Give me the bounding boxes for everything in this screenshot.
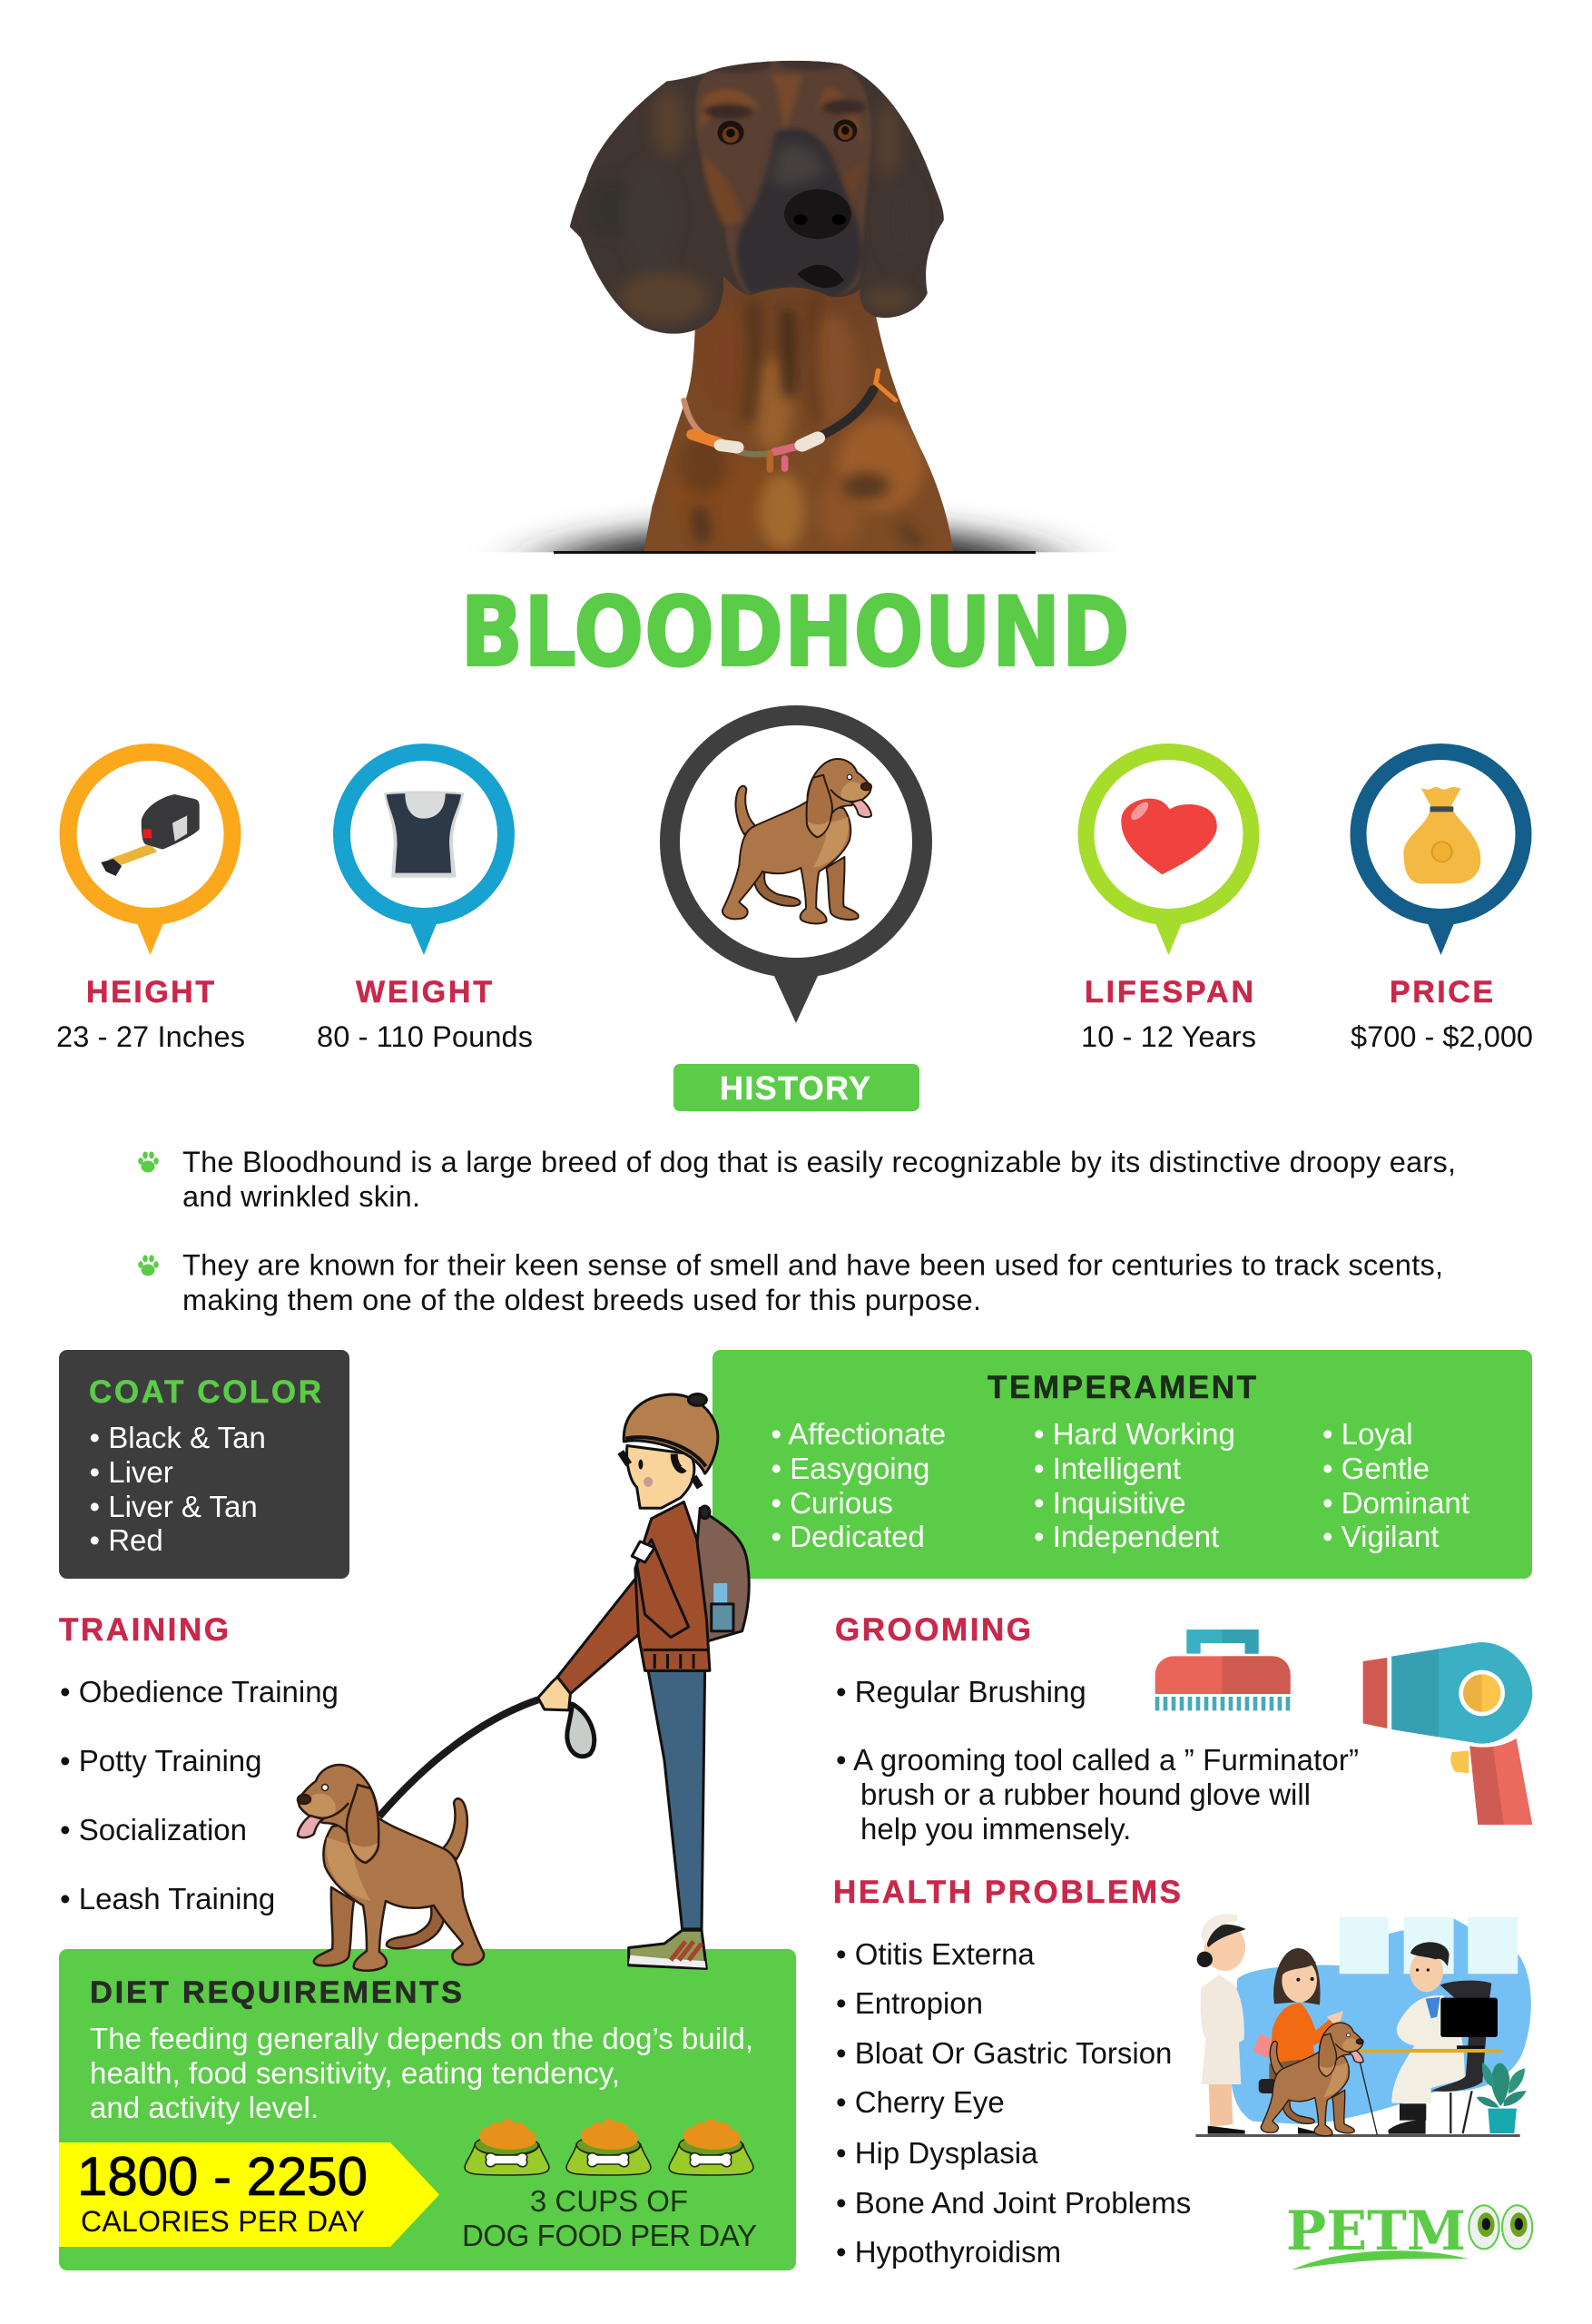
illustration: vet visit	[1195, 1914, 1531, 2137]
grooming list	[836, 1675, 1359, 1846]
health problems list	[836, 1937, 1191, 2269]
temperament column 2: • Independent	[1034, 1520, 1219, 1553]
temperament column 3	[1322, 1417, 1469, 1553]
training list: • Socialization	[60, 1813, 247, 1846]
temperament column 1: • Easygoing	[771, 1452, 929, 1485]
head and ears silhouette	[570, 60, 944, 334]
leash	[379, 1699, 538, 1817]
temperament column 1: • Affectionate	[771, 1417, 946, 1451]
coat color list: • Liver	[89, 1455, 173, 1489]
diet paragraph: The feeding generally depends on the dog’s build,	[90, 2022, 753, 2055]
icon: tape measure	[101, 794, 200, 876]
temperament column 2: • Hard Working	[1034, 1417, 1235, 1451]
value: price: $700 - $2,000	[1351, 1020, 1533, 1053]
pin: lifespan	[1086, 752, 1251, 955]
health problems list: • Hip Dysplasia	[836, 2136, 1038, 2170]
training list: • Obedience Training	[60, 1675, 339, 1709]
panel: coat color	[59, 1350, 349, 1579]
grooming list: • A grooming tool called a ” Furminator”	[836, 1743, 1359, 1777]
icon: paw bullet	[138, 1255, 159, 1276]
icon: money bag	[1403, 787, 1480, 883]
nurse	[1197, 1914, 1246, 2134]
nose	[784, 189, 851, 239]
temperament column 1: • Dedicated	[771, 1520, 925, 1553]
training list: • Leash Training	[60, 1882, 275, 1915]
health problems list: • Hypothyroidism	[836, 2235, 1061, 2269]
eyes	[717, 121, 744, 144]
heading: diet: DIET REQUIREMENTS	[90, 1975, 462, 2010]
value: lifespan: 10 - 12 Years	[1081, 1020, 1256, 1053]
ground shadow	[496, 508, 1098, 552]
panel: temperament	[712, 1350, 1532, 1579]
coat color list: • Red	[89, 1523, 163, 1557]
health problems list: • Otitis Externa	[836, 1937, 1035, 1971]
calories callout: 1800 - 2250	[77, 2146, 368, 2207]
plant	[1360, 2063, 1527, 2135]
cups text: 3 CUPS OF	[530, 2184, 688, 2218]
label: lifespan: LIFESPAN	[1085, 975, 1253, 1009]
icon: brush	[1155, 1630, 1291, 1704]
icon: cartoon dog	[722, 759, 871, 923]
logo: petmoo: PETM	[1286, 2200, 1466, 2263]
temperament column 3: • Vigilant	[1322, 1520, 1439, 1553]
temperament column 2: • Intelligent	[1034, 1452, 1181, 1485]
heading: training: TRAINING	[59, 1612, 229, 1648]
pin: weight	[341, 752, 506, 955]
history paragraph 1: and wrinkled skin.	[182, 1180, 420, 1213]
person	[379, 1394, 749, 1968]
title: BLOODHOUND	[460, 576, 1130, 689]
owner	[1253, 1948, 1343, 2134]
history paragraph 2: making them one of the oldest breeds used for this purpose.	[182, 1284, 981, 1316]
label: price: PRICE	[1390, 975, 1493, 1009]
grooming list: help you immensely.	[860, 1812, 1131, 1846]
temperament column 3: • Loyal	[1322, 1417, 1413, 1451]
coat color list	[89, 1421, 266, 1557]
icon: bathroom scale	[384, 791, 464, 878]
history paragraph 2	[182, 1249, 1443, 1316]
health problems list: • Bloat Or Gastric Torsion	[836, 2036, 1172, 2070]
health problems list: • Entropion	[836, 1986, 983, 2020]
grooming list: • Regular Brushing	[836, 1675, 1086, 1709]
face	[695, 61, 871, 295]
temperament column 2: • Inquisitive	[1034, 1486, 1185, 1520]
heading: coat color: COAT COLOR	[89, 1374, 321, 1410]
temperament column 1	[771, 1417, 946, 1553]
calories callout: CALORIES PER DAY	[81, 2205, 365, 2238]
cups text: DOG FOOD PER DAY	[462, 2219, 757, 2252]
label: height: HEIGHT	[86, 975, 214, 1009]
temperament column 3: • Gentle	[1322, 1452, 1430, 1485]
training list: • Potty Training	[60, 1744, 261, 1777]
collar	[684, 370, 896, 469]
health problems list: • Cherry Eye	[836, 2085, 1005, 2119]
icons: food bowls	[465, 2119, 753, 2175]
vet dog	[1261, 2023, 1363, 2136]
health problems list: • Bone And Joint Problems	[836, 2186, 1191, 2220]
heading: grooming: GROOMING	[835, 1612, 1031, 1648]
history badge	[673, 1064, 919, 1111]
history paragraph 1	[182, 1146, 1456, 1213]
pin: height	[68, 752, 232, 955]
icon: heart	[1121, 799, 1217, 874]
heading: temperament: TEMPERAMENT	[988, 1370, 1256, 1405]
label: weight: WEIGHT	[356, 975, 492, 1009]
icon: hair dryer	[1363, 1642, 1532, 1825]
history paragraph 1: The Bloodhound is a large breed of dog that is easily recognizable by its distinctive droopy ears,	[182, 1146, 1456, 1178]
history paragraph 2: They are known for their keen sense of smell and have been used for centuries to track scents,	[182, 1249, 1443, 1282]
cups text	[462, 2184, 757, 2252]
pin: history dog	[670, 715, 922, 1023]
coat color list: • Black & Tan	[89, 1421, 266, 1454]
heading: health problems: HEALTH PROBLEMS	[833, 1875, 1181, 1910]
icon: paw bullet	[138, 1151, 159, 1173]
illustration: person walking dog	[298, 1394, 749, 1971]
hero photo: bloodhound	[546, 54, 1048, 606]
pin: price	[1358, 752, 1523, 955]
muzzle	[737, 129, 862, 299]
history badge: HISTORY	[720, 1069, 870, 1107]
value: height: 23 - 27 Inches	[56, 1020, 245, 1053]
value: weight: 80 - 110 Pounds	[317, 1020, 533, 1053]
panel: diet requirements	[59, 1949, 796, 2270]
training list	[60, 1675, 339, 1915]
diet paragraph	[90, 2022, 753, 2124]
history text	[138, 1146, 1456, 1316]
temperament column 3: • Dominant	[1322, 1486, 1469, 1520]
temperament column 1: • Curious	[771, 1486, 893, 1520]
diet paragraph: and activity level.	[90, 2091, 319, 2124]
grooming list: brush or a rubber hound glove will	[860, 1777, 1311, 1811]
calories callout	[59, 2142, 439, 2247]
logo: petmoo	[1286, 2200, 1532, 2270]
temperament column 2	[1034, 1417, 1235, 1553]
diet paragraph: health, food sensitivity, eating tendency,	[90, 2056, 620, 2090]
walking dog	[298, 1765, 484, 1971]
coat color list: • Liver & Tan	[89, 1490, 258, 1523]
doctor	[1359, 1942, 1501, 2134]
